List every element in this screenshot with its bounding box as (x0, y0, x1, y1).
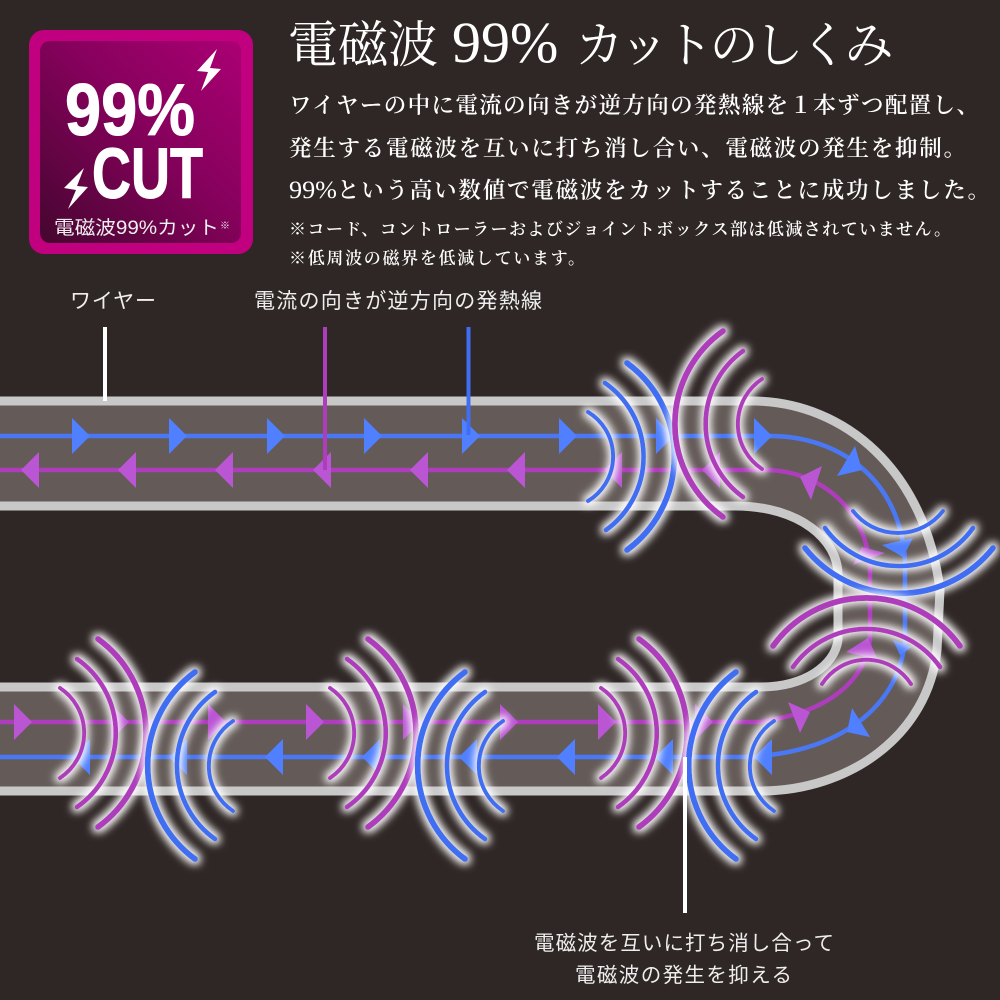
label: wire: ワイヤー (70, 290, 156, 313)
leader: cancel callout (683, 757, 687, 913)
heating wire: magenta (0, 470, 870, 722)
badge: 99% CUT: 電磁波99%カット (54, 217, 219, 239)
footnotes: ※低周波の磁界を低減しています。 (289, 249, 585, 268)
callout text: 電磁波を互いに打ち消し合って (534, 932, 834, 955)
arrows: magenta current bottom (14, 638, 878, 740)
wave group 1 (588, 331, 762, 550)
badge: 99% CUT: ※ (220, 221, 230, 232)
footnotes: ※コード、コントローラーおよびジョイントボックス部は低減されていません。 (289, 220, 951, 239)
title: 99% (452, 10, 558, 75)
wave group 3 (330, 639, 503, 859)
body text: ワイヤーの中に電流の向きが逆方向の発熱線を１本ずつ配置し、 (289, 93, 979, 118)
wave group 5: right side blue (805, 511, 993, 593)
label: heating wires: 電流の向きが逆方向の発熱線 (254, 290, 542, 313)
wave group 4 (601, 639, 774, 859)
leader: wire (103, 327, 107, 401)
body text: という高い数値で電磁波をカットすることに成功しました。 (337, 178, 990, 203)
badge: 99% CUT: CUT (92, 135, 203, 214)
wave group 2 (60, 639, 233, 859)
leader: magenta wire (323, 327, 327, 470)
body text (289, 93, 990, 204)
wave group 6: right side magenta (773, 598, 960, 684)
title: カットのしくみ (575, 18, 891, 73)
callout text (534, 932, 834, 987)
badge: 99% CUT (29, 30, 253, 254)
footnotes (289, 220, 951, 268)
body text: 99% (289, 177, 337, 204)
title: 電磁波 (288, 17, 438, 73)
heating wire: blue (0, 436, 905, 757)
arrows: magenta current top (21, 452, 885, 565)
leader: blue wire (466, 327, 470, 435)
arrows: blue current bottom (72, 640, 912, 775)
wire body (0, 401, 940, 791)
callout text: 電磁波の発生を抑える (575, 964, 792, 987)
body text: 発生する電磁波を互いに打ち消し合い、電磁波の発生を抑制。 (289, 136, 966, 161)
arrows: blue current top (72, 418, 913, 557)
badge: 99% CUT: 99% (65, 70, 195, 151)
